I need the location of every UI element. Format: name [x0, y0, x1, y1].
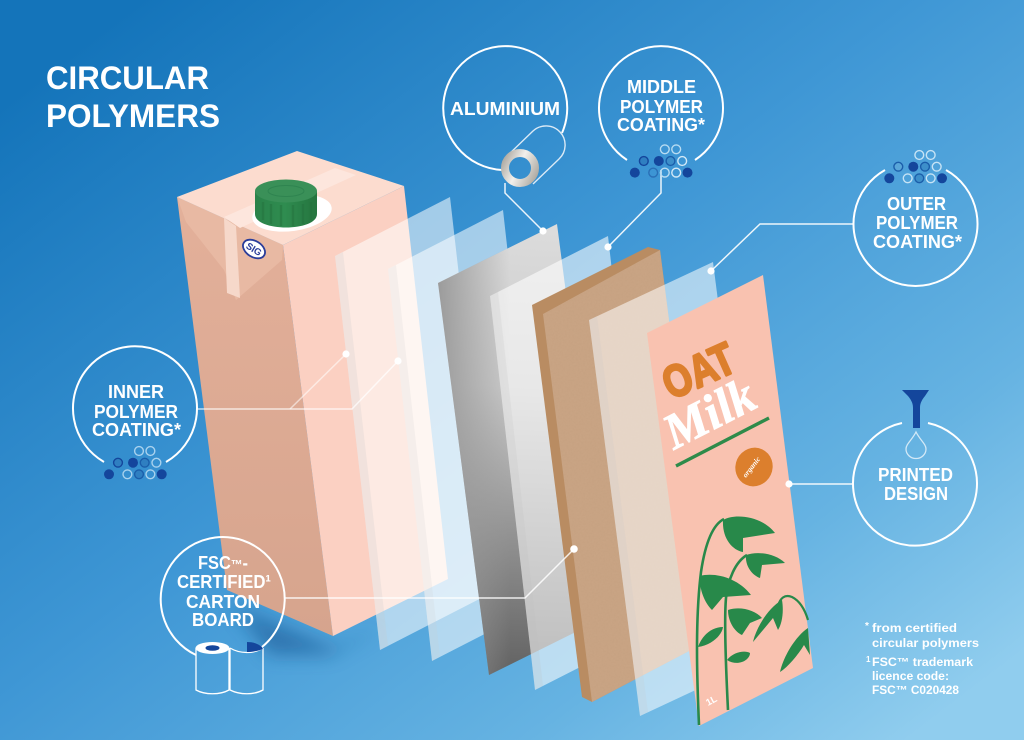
- layer: middle polymer sheet: [490, 236, 653, 690]
- callout: middle polymer coating: COATING*: [617, 114, 706, 135]
- footnotes: FSC™ trademark: [872, 657, 974, 669]
- footnotes: *: [865, 621, 869, 632]
- 1L volume mark: 1L: [704, 694, 719, 709]
- footnotes: circular polymers: [872, 638, 979, 650]
- layer: aluminium sheet: [438, 224, 608, 675]
- green screw cap: [255, 180, 317, 228]
- icon: ink drop: [906, 432, 926, 458]
- SIG logo: [240, 236, 268, 262]
- box right face: [283, 186, 448, 636]
- orange seal: [729, 442, 779, 492]
- footnotes: licence code:: [872, 671, 949, 683]
- box left fold: [177, 197, 283, 300]
- callout: outer polymer coating: COATING*: [873, 231, 963, 252]
- top seal band: [224, 168, 356, 228]
- icon: aluminium foil roll: [505, 126, 565, 184]
- icon: polymer molecules: [104, 447, 167, 479]
- callout: inner polymer coating: COATING*: [92, 419, 182, 440]
- oat plant: [697, 516, 810, 725]
- box shadow: [232, 605, 385, 655]
- callout: middle polymer coating: MIDDLE: [627, 76, 696, 97]
- title: [46, 60, 220, 134]
- footnotes: from certified: [872, 623, 957, 635]
- callout: inner polymer coating: POLYMER: [94, 401, 178, 422]
- carton box: [177, 151, 448, 655]
- OAT wordmark: OAT: [654, 332, 743, 409]
- callout: FSC certified carton board: [161, 537, 285, 694]
- Milk wordmark: Milk: [653, 366, 765, 460]
- icon: carton rolls: [196, 642, 263, 694]
- SIG logo: SIG: [244, 241, 263, 259]
- icon: polymer molecules: [630, 145, 692, 178]
- callout: aluminium: [443, 46, 567, 184]
- callout: aluminium: ALUMINIUM: [450, 98, 560, 119]
- callout: FSC certified carton board: BOARD: [192, 609, 254, 630]
- layer: carton board: [532, 247, 710, 702]
- callout: inner polymer coating: [73, 346, 197, 479]
- layer: inner polymer sheet 2: [388, 210, 547, 661]
- callout: outer polymer coating: OUTER: [887, 193, 946, 214]
- layer: printed design panel: [647, 275, 813, 726]
- callout: printed design: PRINTED: [878, 464, 953, 485]
- box top face: [177, 151, 404, 245]
- callout: middle polymer coating: [599, 46, 723, 178]
- green underline: [676, 418, 769, 466]
- title: POLYMERS: [46, 98, 220, 134]
- layer: inner polymer sheet 1: [335, 197, 495, 650]
- white opening around the cap: [250, 190, 334, 236]
- orange seal: organic: [740, 454, 763, 479]
- icon: ink funnel: [902, 390, 929, 428]
- callout: middle polymer coating: POLYMER: [620, 96, 703, 117]
- callout: FSC certified carton board: FSC™-: [198, 552, 248, 573]
- title: CIRCULAR: [46, 60, 209, 96]
- footnotes: 1: [866, 655, 871, 664]
- vertical seal strip: [224, 218, 240, 298]
- box left face: [177, 197, 333, 636]
- footnotes: FSC™ C020428: [872, 685, 960, 697]
- leader lines and dots: [198, 170, 854, 598]
- callout: FSC certified carton board: CERTIFIED¹: [177, 571, 271, 592]
- callout: inner polymer coating: INNER: [108, 381, 164, 402]
- footnotes: [865, 621, 979, 697]
- callout: printed design: [853, 390, 977, 546]
- callout: FSC certified carton board: CARTON: [186, 591, 260, 612]
- layer: outer polymer sheet: [589, 262, 764, 716]
- callout: outer polymer coating: POLYMER: [876, 212, 958, 233]
- callout: outer polymer coating: [854, 151, 977, 286]
- callout: printed design: DESIGN: [884, 483, 948, 504]
- icon: polymer molecules: [884, 151, 947, 183]
